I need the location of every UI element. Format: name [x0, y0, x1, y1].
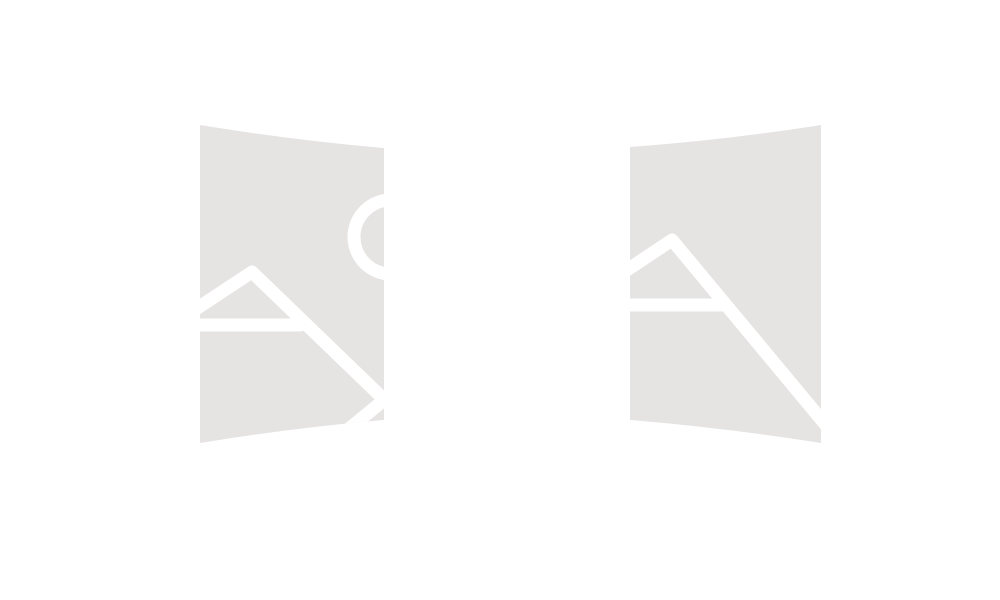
icon: mountain right	[615, 240, 830, 430]
icon: mountain	[200, 266, 384, 424]
icon: sun circle	[348, 194, 384, 280]
panel: left image half	[200, 125, 384, 443]
panel: right image half	[630, 125, 821, 443]
illustration: split image placeholder	[200, 125, 821, 443]
